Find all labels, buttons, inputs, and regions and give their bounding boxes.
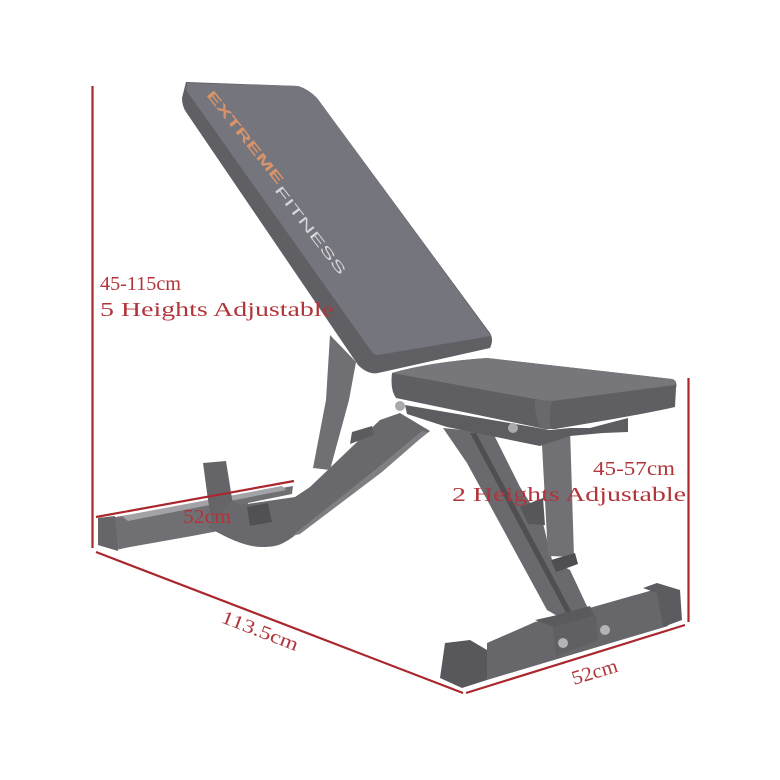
label: overall height — [100, 273, 334, 321]
dimension: length line — [96, 552, 463, 693]
right rubber foot — [643, 583, 682, 627]
lower angled leg — [443, 428, 592, 625]
bench product photo — [98, 82, 682, 688]
upright seat post — [542, 428, 574, 557]
bolts — [395, 401, 518, 433]
label: seat height: 45-57cm — [593, 458, 676, 480]
post knob — [551, 553, 578, 572]
front base crossbar — [440, 583, 682, 688]
backrest support post — [313, 335, 356, 470]
dimension: overall height line — [91, 86, 94, 548]
leg dark seam — [470, 433, 577, 624]
frame highlight strip — [292, 431, 428, 536]
curved main frame — [208, 413, 430, 547]
label: length: 113.5cm — [218, 607, 302, 656]
backrest pad — [182, 82, 492, 373]
label: seat height: 2 Heights Adjustable — [452, 484, 686, 506]
rear base bracket — [247, 503, 272, 526]
label: overall height: 5 Heights Adjustable — [100, 299, 334, 321]
seat bracket — [405, 405, 628, 446]
label: rear width: 52cm — [183, 506, 231, 528]
label: seat height — [452, 458, 686, 506]
leg bracket — [520, 498, 545, 525]
rear base crossbar — [98, 461, 293, 551]
dimension: seat height line — [687, 378, 690, 622]
left rubber foot — [440, 640, 487, 688]
dimension: front width line — [466, 625, 685, 693]
dimension: rear width line — [96, 481, 294, 517]
logo: FITNESS: FITNESS — [272, 183, 350, 278]
label: overall height: 45-115cm — [100, 273, 181, 295]
seat pad — [392, 358, 676, 429]
backrest stop — [350, 426, 374, 444]
logo: EXTREME: EXTREME — [204, 88, 287, 187]
label: front width: 52cm — [569, 655, 621, 690]
